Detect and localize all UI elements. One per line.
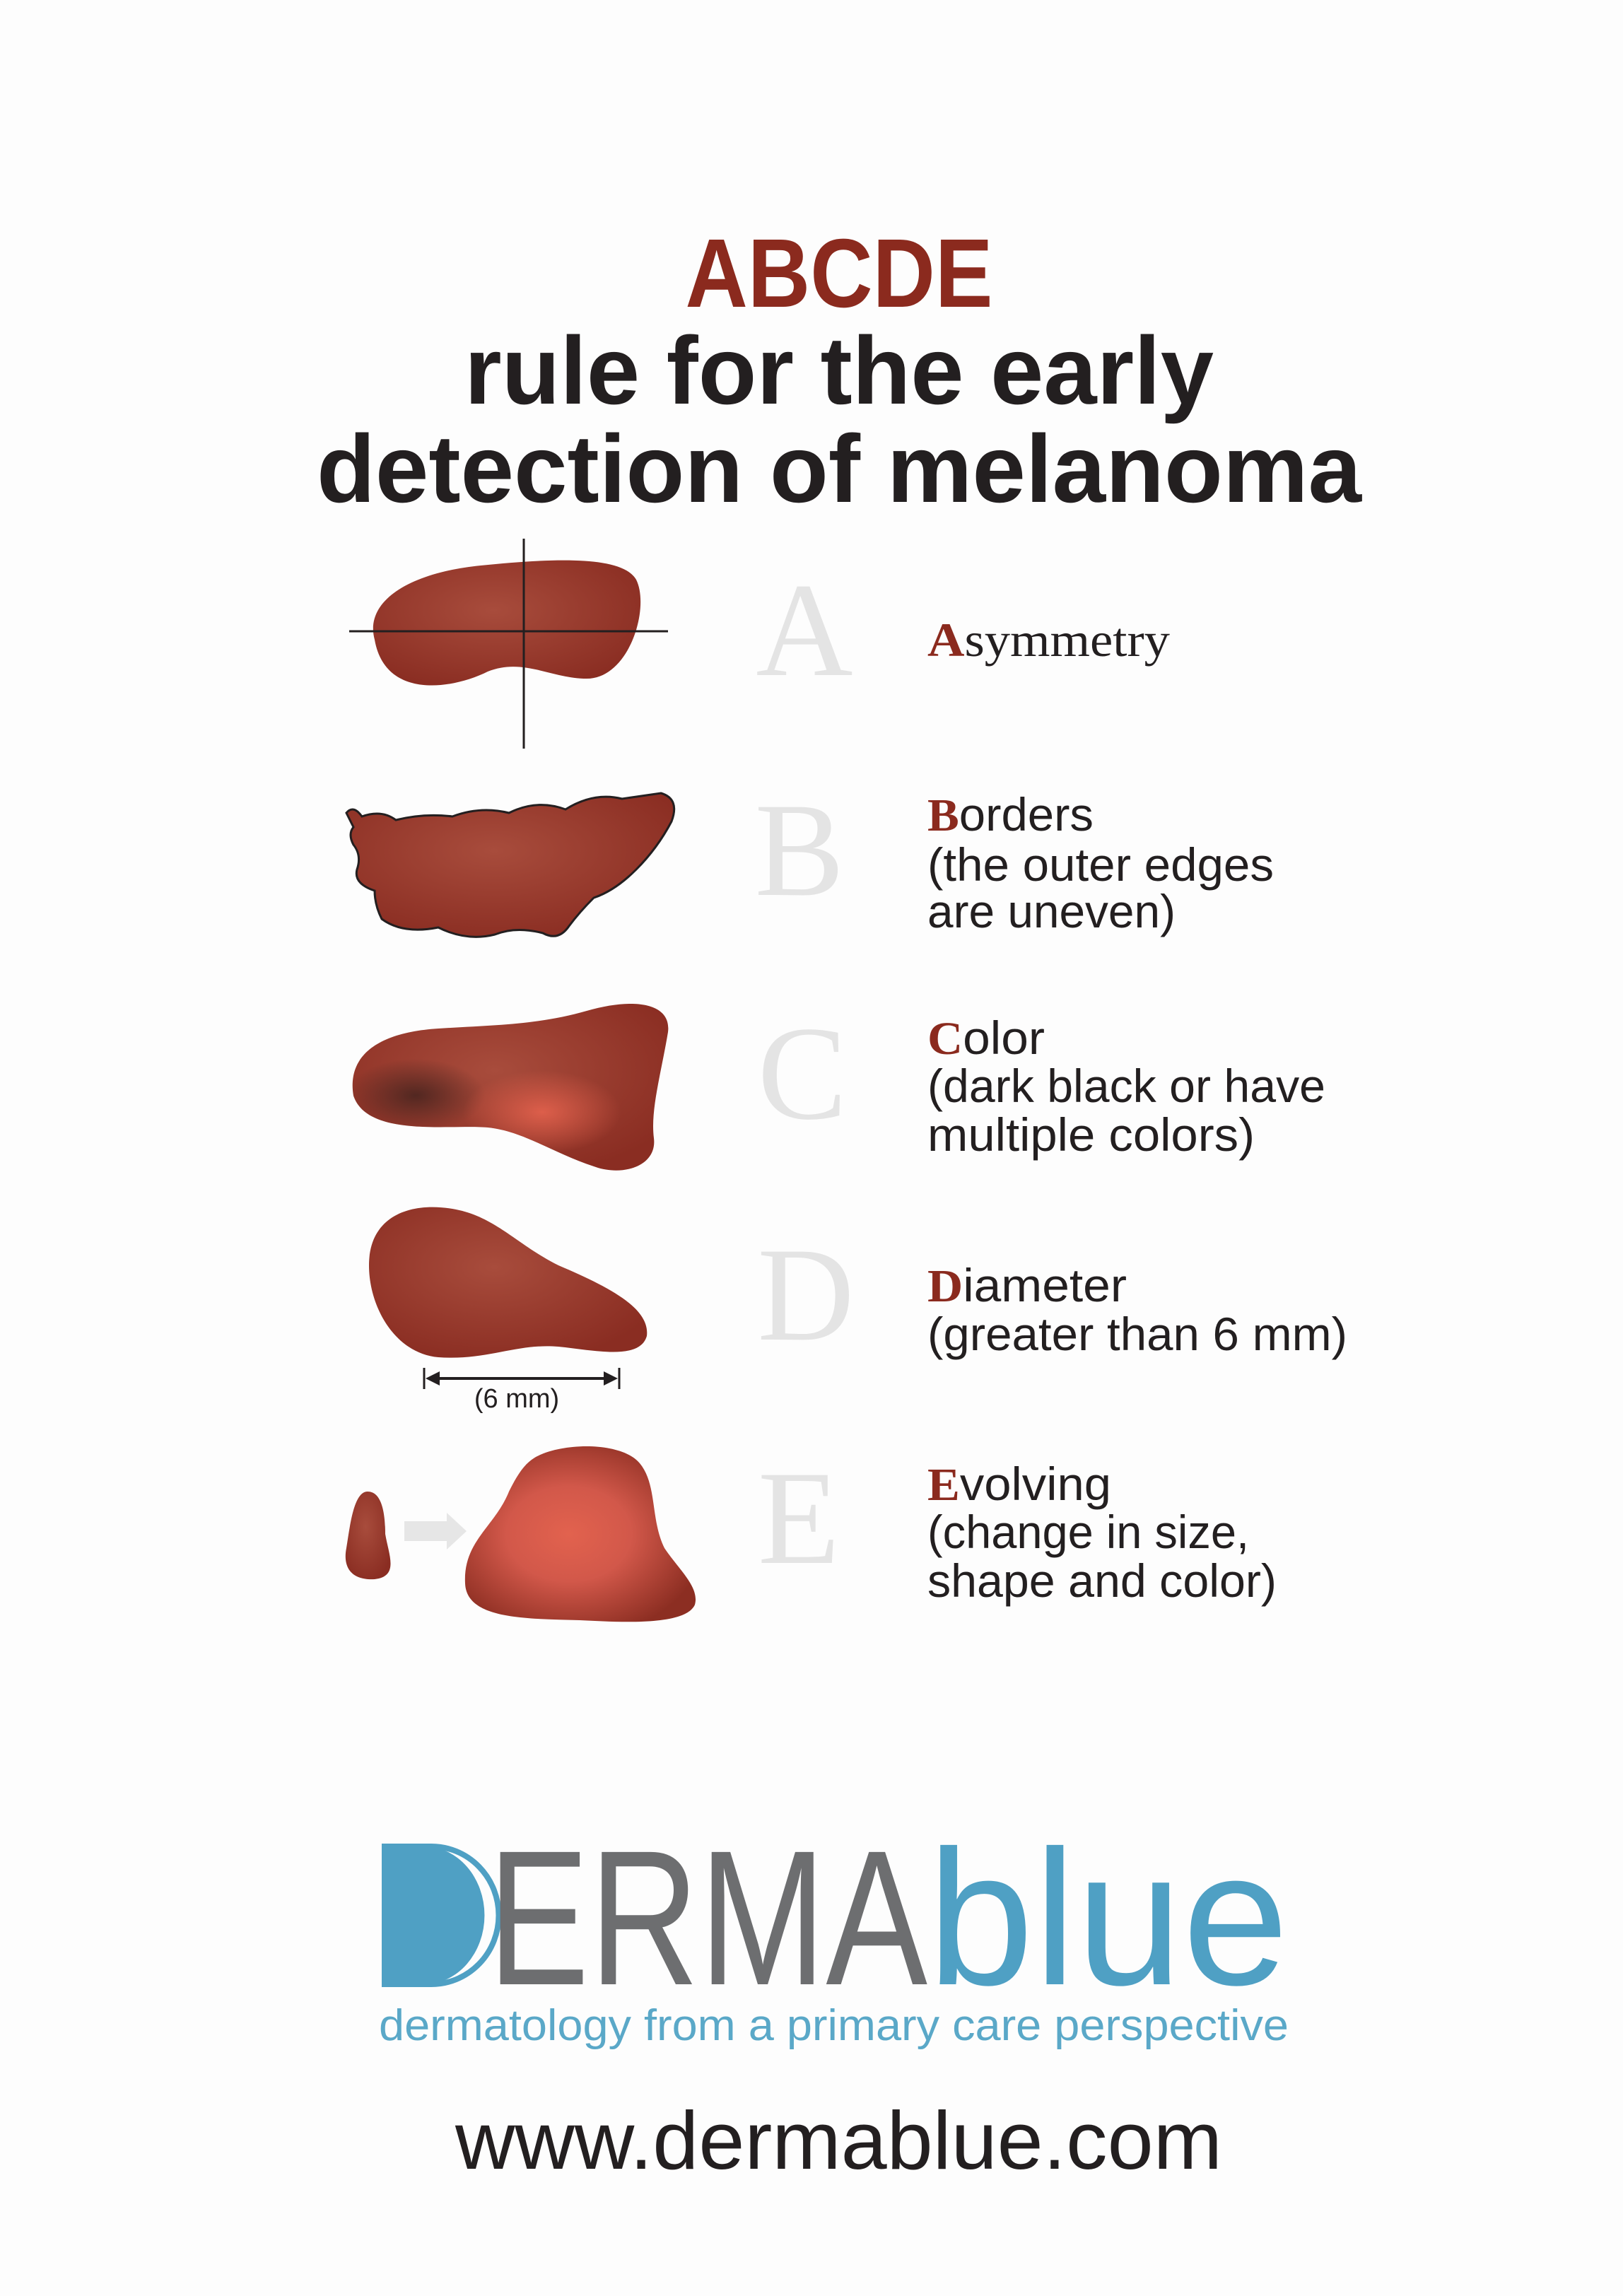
label: Borders — [927, 788, 1274, 937]
title: rule for the early — [464, 317, 1214, 424]
label: Diameter — [927, 1259, 1347, 1360]
letter B: B — [755, 776, 844, 925]
label: Asymmetry: Asymmetry — [927, 613, 1170, 667]
label: Diameter: (greater than 6 mm) — [927, 1308, 1347, 1360]
logo: DERMAblue: dermatology from a primary care perspective — [379, 2001, 1289, 2050]
label: Evolving: shape and color) — [927, 1554, 1277, 1607]
title: detection of melanoma — [317, 415, 1362, 522]
icon: diameter mole: (6 mm) — [474, 1384, 559, 1414]
label: Borders: are uneven) — [927, 885, 1176, 937]
letter C: C — [758, 1000, 847, 1148]
website url: www.dermablue.com — [455, 2095, 1222, 2186]
label: Color: Color — [927, 1012, 1045, 1065]
logo: DERMAblue — [379, 1810, 1289, 2050]
label: Diameter: Diameter — [927, 1259, 1127, 1312]
title — [317, 219, 1362, 522]
logo: DERMAblue: ERMA — [488, 1810, 928, 2025]
label: Borders: (the outer edges — [927, 838, 1274, 891]
label: Color: multiple colors) — [927, 1108, 1255, 1161]
icon: evolving moles — [346, 1446, 696, 1622]
letter D: D — [757, 1221, 855, 1369]
icon: asymmetry mole — [349, 539, 668, 749]
logo: DERMAblue: blue — [927, 1810, 1289, 2025]
label: Color: (dark black or have — [927, 1060, 1325, 1112]
label: Evolving: (change in size, — [927, 1506, 1249, 1558]
title: ABCDE — [686, 219, 992, 328]
letter E: E — [758, 1444, 840, 1593]
label: Evolving — [927, 1458, 1277, 1607]
label: Color — [927, 1012, 1325, 1161]
label: Borders: Borders — [927, 788, 1094, 841]
label: Evolving: Evolving — [927, 1458, 1111, 1511]
icon: color mole — [353, 1004, 668, 1171]
icon: borders mole — [346, 793, 674, 937]
letter A: A — [756, 556, 853, 705]
icon: diameter mole — [369, 1207, 647, 1414]
